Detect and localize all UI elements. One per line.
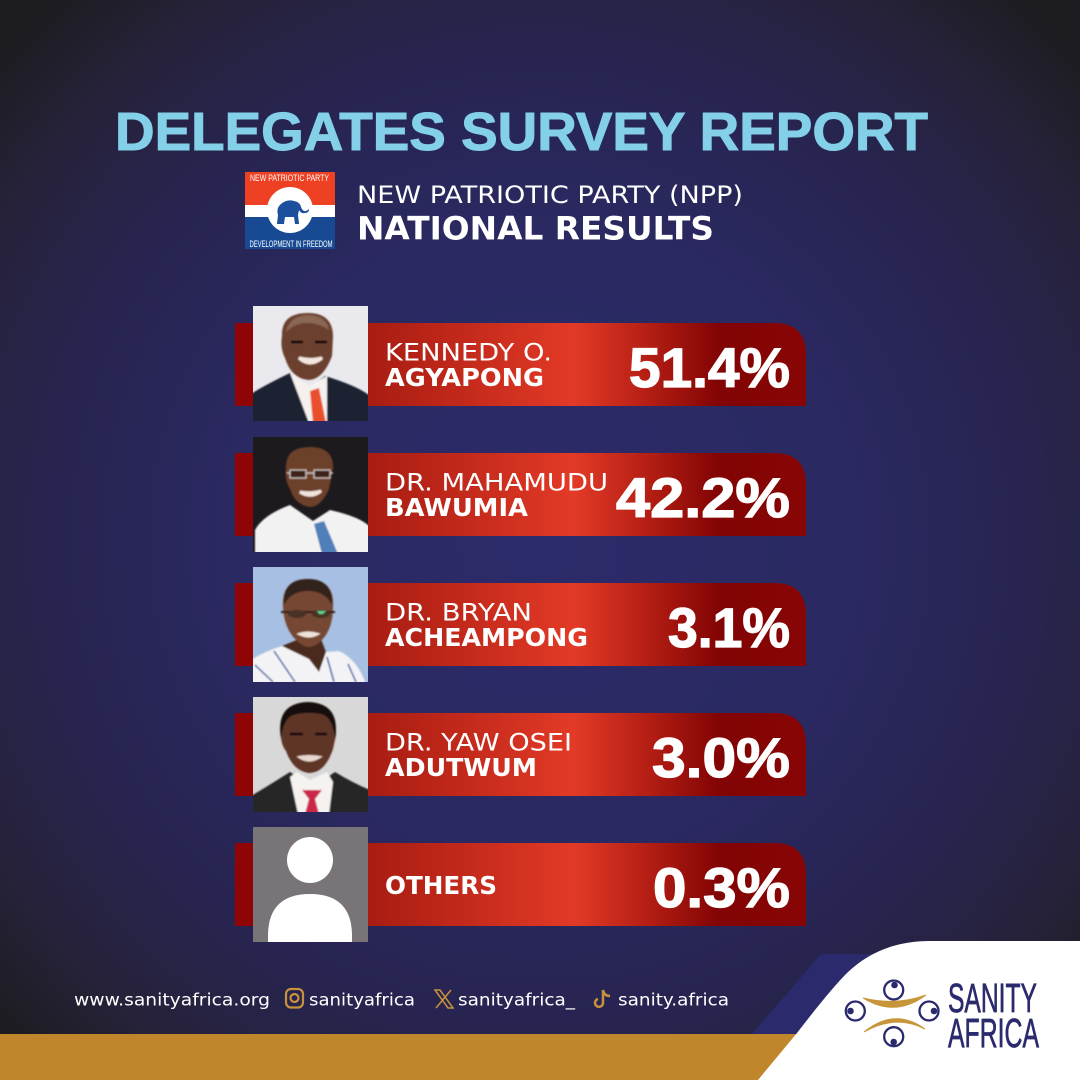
subtitle [357, 181, 743, 248]
result row: Others [235, 827, 806, 942]
name [385, 728, 572, 782]
icon: four figures mark [846, 980, 938, 1046]
icon: instagram [286, 989, 303, 1008]
name: DR. YAW OSEI [385, 728, 572, 756]
bar [235, 453, 806, 536]
bar [235, 843, 806, 926]
bar [235, 713, 806, 796]
percentage: 3.0% [652, 726, 790, 789]
instagram handle: sanityafrica [309, 990, 415, 1010]
subtitle: NEW PATRIOTIC PARTY (NPP) [357, 181, 743, 209]
X handle: sanityafrica_ [458, 990, 576, 1010]
footer accent: navy slant [752, 954, 880, 1034]
name: ACHEAMPONG [385, 623, 588, 652]
name: AGYAPONG [385, 363, 544, 392]
percentage: 3.1% [668, 596, 790, 659]
percentage: 42.2% [616, 466, 790, 529]
name: BAWUMIA [385, 493, 528, 522]
name: OTHERS [385, 871, 497, 900]
name: DR. MAHAMUDU [385, 468, 608, 496]
footer band: gold [0, 1034, 800, 1080]
icon: NPP party flag logo [245, 172, 335, 249]
result row: Dr. Mahamudu Bawumia [235, 437, 806, 554]
photo: Yaw Osei Adutwum [251, 697, 370, 814]
icon: X [435, 990, 453, 1008]
tiktok handle: sanity.africa [618, 990, 729, 1010]
photo: Bryan Acheampong [251, 567, 368, 684]
result row: Dr. Bryan Acheampong [235, 567, 806, 684]
subtitle: NATIONAL RESULTS [357, 210, 714, 248]
name [385, 598, 588, 652]
icon: generic person placeholder [253, 827, 368, 942]
footer panel: white logo area [758, 941, 1080, 1080]
name [385, 468, 608, 522]
bar [235, 323, 806, 406]
wordmark [948, 975, 1039, 1056]
photo: Mahamudu Bawumia [253, 437, 370, 554]
percentage: 51.4% [629, 336, 790, 399]
website: www.sanityafrica.org [74, 990, 270, 1010]
name: DR. BRYAN [385, 598, 532, 626]
result row: Dr. Yaw Osei Adutwum [235, 697, 806, 814]
social links [74, 989, 729, 1010]
title: DELEGATES SURVEY REPORT [115, 102, 928, 162]
name [385, 338, 552, 392]
result row: Kennedy O. Agyapong [235, 306, 806, 423]
bar [235, 583, 806, 666]
photo: Kennedy Agyapong [251, 306, 370, 423]
name: KENNEDY O. [385, 338, 552, 366]
icon: NPP party flag logo: NEW PATRIOTIC PARTY [250, 173, 329, 184]
icon: NPP party flag logo: DEVELOPMENT IN FREEDOM [250, 239, 332, 249]
percentage: 0.3% [653, 856, 790, 919]
name: ADUTWUM [385, 753, 537, 782]
icon: tiktok [595, 990, 610, 1007]
logo: Sanity Africa [846, 975, 1039, 1056]
